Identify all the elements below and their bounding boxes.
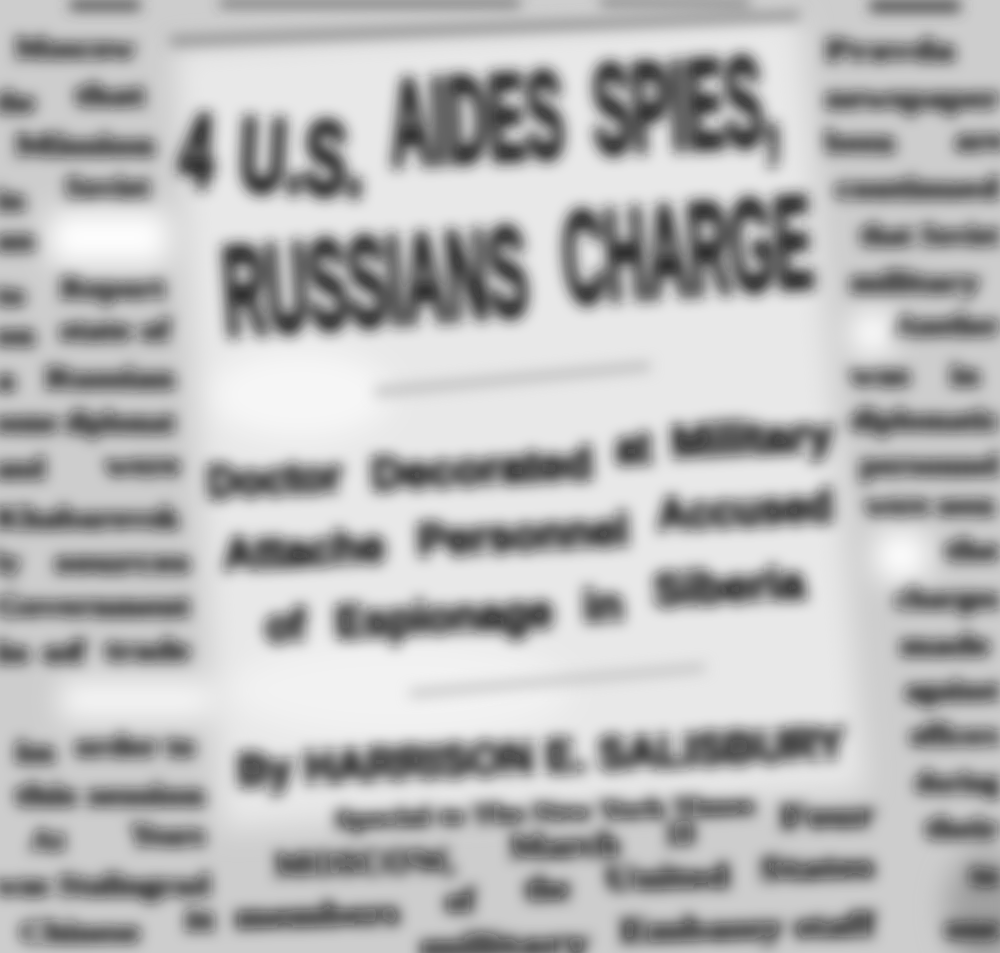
right newspaper column: that Soviet (860, 217, 1000, 252)
right newspaper column: their (925, 810, 1000, 845)
rule under subheading (410, 664, 705, 697)
left newspaper column: Russian (45, 360, 175, 395)
article body text: Embassy staff (619, 906, 876, 950)
left newspaper column (0, 30, 216, 949)
left newspaper column: in (15, 734, 55, 769)
right newspaper column: newspaper (825, 80, 1000, 115)
subheading: in (582, 578, 624, 632)
left newspaper column: state of (60, 312, 171, 347)
subheading: Military (670, 408, 835, 468)
article body text: March (509, 826, 620, 866)
subheading: Doctor (206, 449, 343, 508)
article body text: United (604, 858, 730, 898)
left newspaper column: At (30, 822, 66, 857)
left newspaper column: some diplomat (0, 404, 176, 439)
left newspaper column: Mission (15, 127, 155, 162)
subheading: Attache (222, 520, 386, 580)
right newspaper column: was (850, 357, 910, 392)
left newspaper column: Report (60, 270, 166, 305)
subheading: Decorated (370, 436, 594, 500)
left newspaper column: Chinese (20, 914, 140, 949)
highlight: left column gap upper (50, 212, 168, 264)
left newspaper column: was Stalingrad (0, 867, 210, 902)
top rule (170, 10, 800, 46)
right newspaper column: been (825, 124, 895, 159)
headline line one (177, 29, 782, 220)
right newspaper column: personnel (860, 447, 1000, 482)
subheading: of (264, 598, 307, 652)
subheading (206, 408, 835, 652)
right newspaper column: against (905, 672, 1000, 707)
right newspaper column: military (850, 264, 981, 299)
right newspaper column: one (945, 910, 1000, 945)
rule under headline (375, 362, 650, 396)
headline line one: U.S. (237, 96, 368, 220)
left newspaper column: order to (75, 728, 195, 763)
right newspaper column: were seen (865, 487, 995, 522)
subheading: Personnel (416, 503, 630, 566)
highlight: right column gap lower (876, 532, 926, 580)
shade: bottom right corner (945, 850, 1000, 953)
right newspaper column: in (950, 357, 980, 392)
highlight: lower article glow (230, 640, 570, 740)
left newspaper column: Soviet (65, 169, 151, 204)
right newspaper column: Pravda (825, 32, 956, 67)
article body text: of (444, 882, 476, 920)
left newspaper column: Years (130, 817, 205, 852)
left newspaper column: trade (105, 632, 190, 667)
left newspaper column: it (185, 902, 216, 937)
article body text: States (759, 848, 875, 888)
highlight: left column gap lower (60, 680, 210, 720)
left newspaper column: were (105, 447, 180, 482)
headline line two: RUSSIANS (218, 200, 532, 364)
headline line one: 4 (177, 92, 217, 211)
left newspaper column: Moscow (15, 30, 136, 65)
top cut-off text (70, 0, 960, 12)
left newspaper column: this session (15, 777, 205, 812)
article body text: MOSCOW, (274, 842, 455, 884)
article body text: the (524, 870, 570, 908)
right newspaper column: to (970, 857, 1000, 892)
right newspaper column: charges (895, 580, 1000, 615)
byline: By HARRISON E. SALISBURY (236, 716, 846, 796)
right newspaper column: the (945, 532, 1000, 567)
article body text: members (234, 895, 400, 936)
highlight: right column gap upper (852, 312, 892, 354)
right newspaper column: made (900, 627, 990, 662)
right newspaper column: diplomatic (850, 402, 1000, 437)
left newspaper column: that (75, 77, 146, 112)
headline line one: AIDES (386, 46, 567, 193)
panel: central article (175, 14, 865, 830)
subheading: Accused (656, 479, 834, 540)
right newspaper column (825, 32, 1000, 945)
article body text: Four (779, 797, 875, 836)
right newspaper column: are (955, 122, 1000, 157)
subheading: at (614, 420, 652, 474)
article body text (234, 790, 876, 953)
right newspaper column: continued (835, 170, 1000, 205)
article body text: Special to The New York Times (334, 790, 755, 834)
text: SPIES, (589, 29, 782, 182)
left newspaper column: Government (0, 588, 191, 623)
subheading: Siberia (652, 556, 807, 616)
subheading: Espionage (334, 585, 554, 648)
left newspaper column: sources (55, 544, 190, 579)
article body text: 10 (664, 815, 695, 853)
highlight: article glow (210, 350, 390, 440)
